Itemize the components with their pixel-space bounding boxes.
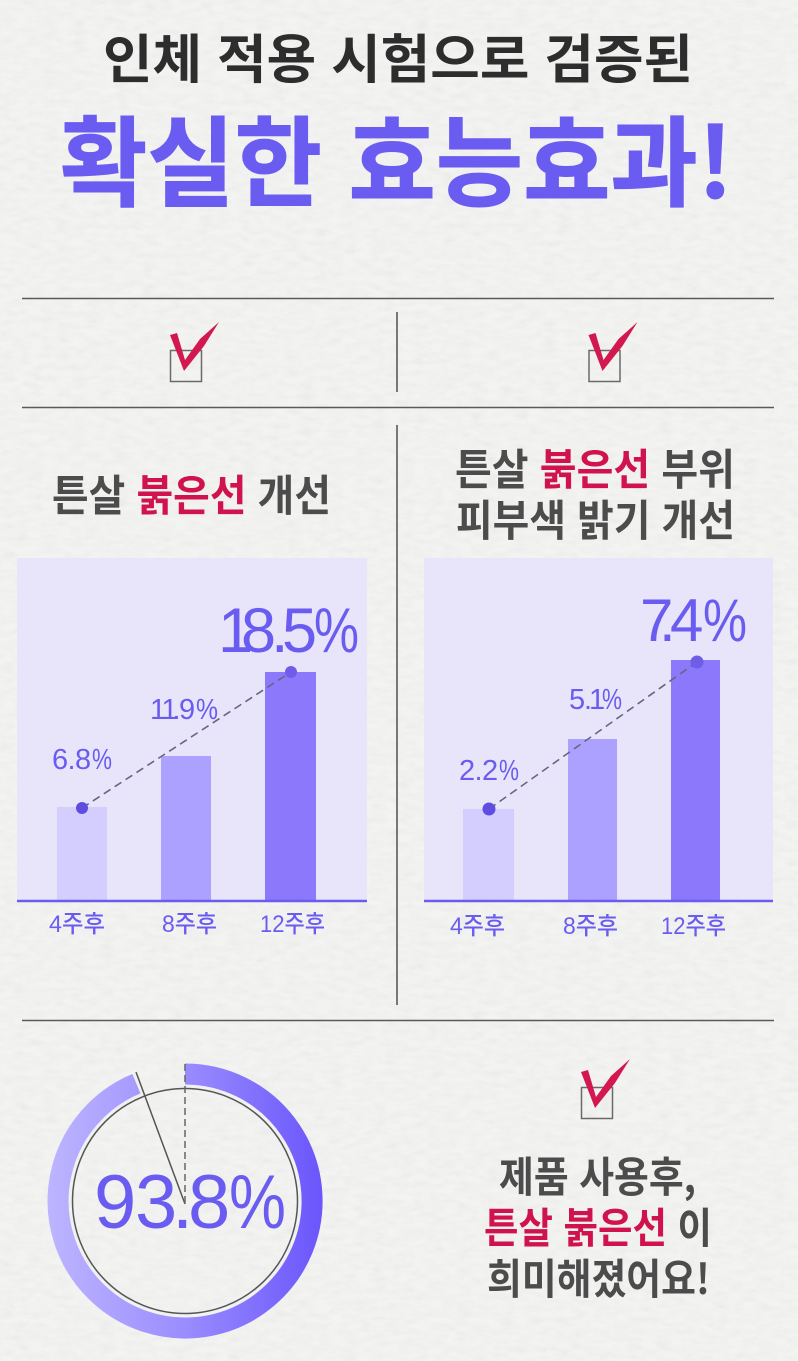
bar: 4 weeks bbox=[463, 809, 514, 901]
axis label: 8주후: 8주후 bbox=[563, 913, 618, 940]
bar chart: left bbox=[17, 558, 367, 938]
value: 2.2%: % bbox=[499, 755, 519, 787]
value: 5.1% bbox=[569, 684, 622, 716]
title line 2: 확실한 효능효과! bbox=[60, 85, 733, 227]
value: 7.4% bbox=[640, 587, 747, 654]
icon: left checkbox bbox=[170, 322, 219, 382]
axis label: 8주후: 8주후 bbox=[162, 911, 217, 938]
text: result message: 제품 사용후, bbox=[499, 1144, 696, 1205]
bar: 8 weeks bbox=[161, 756, 211, 901]
axis label: 4주후: 4주후 bbox=[49, 911, 105, 938]
value: 2.2%: 2.2 bbox=[459, 755, 498, 787]
heading: left chart: 튼살 붉은선 개선 bbox=[52, 462, 331, 524]
bar: 12 weeks bbox=[671, 660, 720, 901]
value: 6.8%: 6.8 bbox=[52, 744, 91, 776]
value: 6.8%: % bbox=[92, 744, 112, 776]
value: 11.9% bbox=[150, 694, 218, 726]
axis label: 12주후: 12주후 bbox=[260, 911, 325, 938]
heading: right chart bbox=[455, 436, 735, 549]
value: 11.9%: % bbox=[196, 694, 218, 726]
axis label: 12주후: 12주후 bbox=[661, 913, 726, 940]
bar chart: right bbox=[424, 558, 773, 940]
icon: right checkbox bbox=[588, 322, 638, 382]
value: 7.4%: 7.4 bbox=[640, 587, 703, 654]
value: 6.8% bbox=[52, 744, 112, 776]
bar: 4 weeks bbox=[57, 807, 107, 901]
icon: bottom checkbox bbox=[581, 1059, 630, 1118]
title line 1: 인체 적용 시험으로 검증된 bbox=[103, 18, 693, 94]
donut ring bbox=[58, 1074, 312, 1328]
value: 18.5%: 18.5 bbox=[218, 596, 317, 666]
value: 11.9%: 11.9 bbox=[150, 694, 195, 726]
value: 7.4%: % bbox=[703, 587, 747, 654]
donut chart: 93.8% bbox=[58, 1064, 312, 1328]
text: result message: 희미해졌어요! bbox=[487, 1246, 710, 1307]
text: result message bbox=[484, 1144, 712, 1307]
text: result message: 튼살 붉은선 이 bbox=[484, 1195, 712, 1256]
bar: 12 weeks bbox=[265, 672, 316, 901]
value: 18.5%: % bbox=[314, 596, 359, 666]
axis label: 4주후: 4주후 bbox=[450, 913, 505, 940]
title bbox=[60, 18, 733, 227]
heading: right chart: 피부색 밝기 개선 bbox=[456, 487, 735, 549]
value: 93.8%: % bbox=[229, 1160, 286, 1245]
value: 5.1%: 5.1 bbox=[569, 684, 605, 716]
bar: 8 weeks bbox=[568, 739, 617, 901]
heading: right chart: 튼살 붉은선 부위 bbox=[455, 436, 735, 498]
value: 5.1%: % bbox=[602, 684, 622, 716]
value: 93.8%: 93.8 bbox=[94, 1160, 230, 1245]
value: 2.2% bbox=[459, 755, 519, 787]
